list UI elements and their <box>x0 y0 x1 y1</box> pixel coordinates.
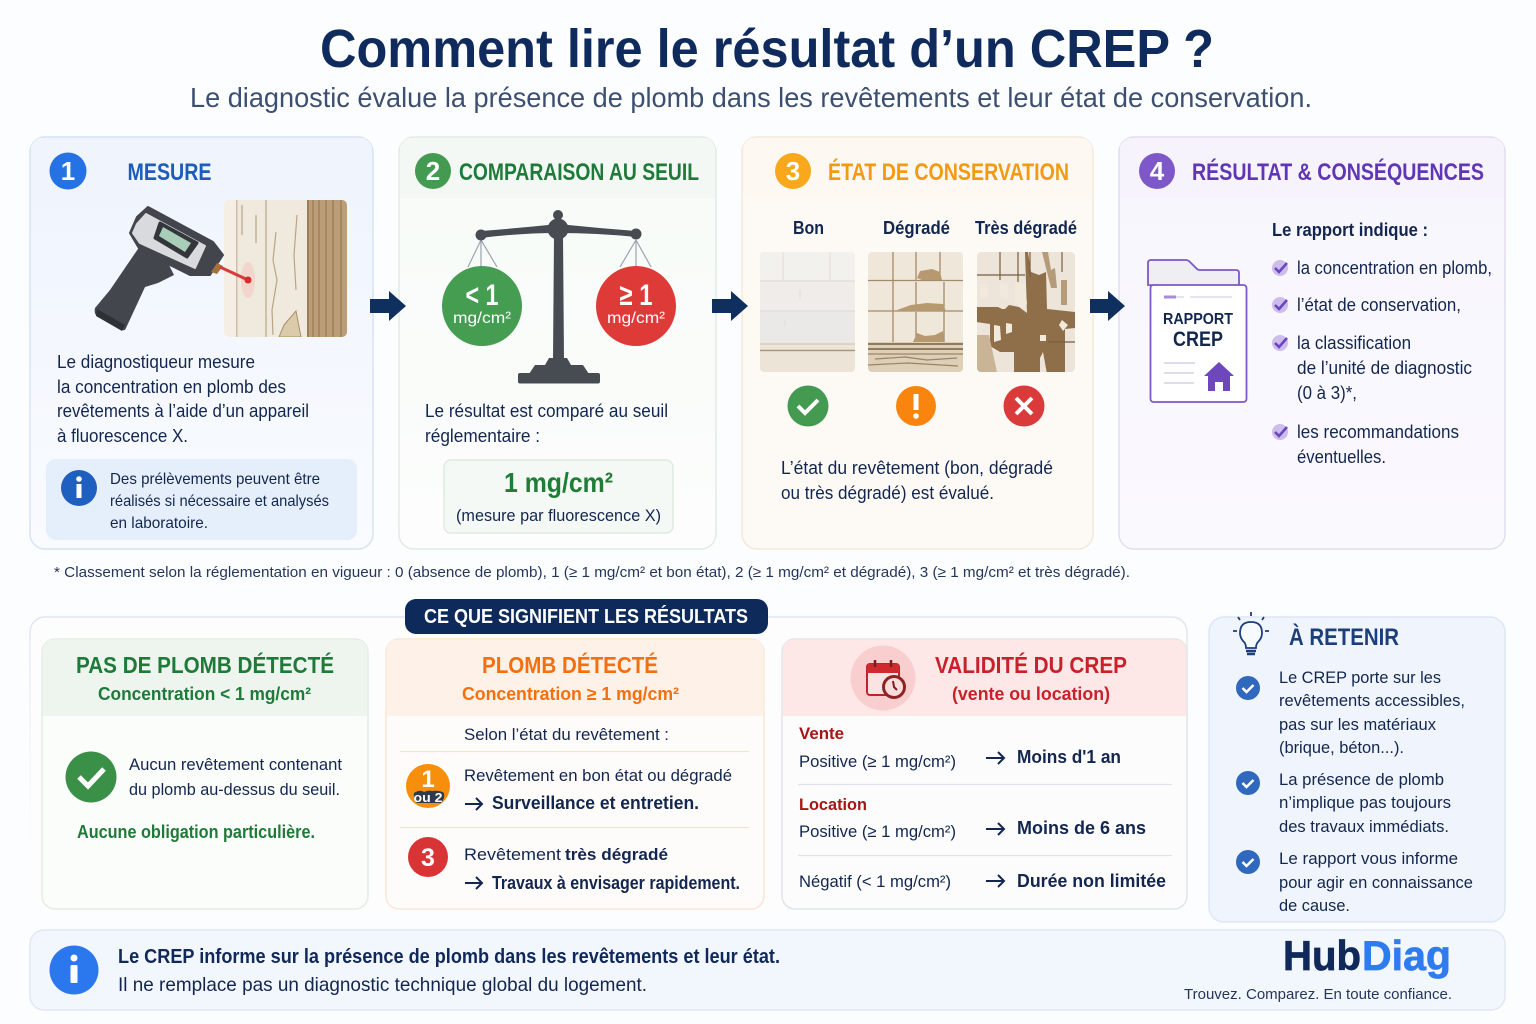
card: plomb détecté: Revêtement <box>464 845 561 864</box>
card: plomb détecté: Travaux à envisager rapidement. <box>492 873 740 893</box>
card: plomb détecté: Surveillance et entretien. <box>492 793 699 813</box>
column labels: Très dégradé <box>975 218 1077 238</box>
arrow: travaux <box>465 877 482 889</box>
card: pas de plomb détecté: Aucune obligation particulière. <box>77 822 315 842</box>
badge: supérieur au seuil: ≥ 1 <box>620 279 652 312</box>
illustration: revêtement en bon état <box>760 252 855 372</box>
callout: seuil réglementaire: (mesure par fluorescence X) <box>456 506 661 525</box>
step number 4 <box>1139 153 1175 189</box>
icon: information <box>50 946 98 994</box>
card: pas de plomb détecté <box>42 639 368 909</box>
column labels: Dégradé <box>883 218 950 238</box>
row: location: Positive (≥ 1 mg/cm²) <box>799 822 956 841</box>
badge: supérieur au seuil: mg/cm² <box>607 310 666 327</box>
key point 3: de cause. <box>1279 896 1350 915</box>
card: plomb détecté <box>386 639 764 909</box>
text: description de la mesure: à fluorescence X. <box>57 426 188 446</box>
key point 3: Le rapport vous informe <box>1279 849 1458 868</box>
checklist: contenu du rapport: de l’unité de diagnostic <box>1297 358 1472 378</box>
key point 1: Le CREP porte sur les <box>1279 668 1441 687</box>
checklist: contenu du rapport: la concentration en plomb, <box>1297 258 1492 278</box>
card: pas de plomb détecté: PAS DE PLOMB DÉTECTÉ <box>76 651 334 678</box>
callout: prélèvements: en laboratoire. <box>110 515 208 532</box>
callout: prélèvements: Des prélèvements peuvent être <box>110 471 320 488</box>
row: vente: Vente <box>799 724 844 743</box>
card: plomb détecté: Revêtement en bon état ou dégradé <box>464 766 732 785</box>
text: comparaison: réglementaire : <box>425 426 540 446</box>
row: vente: Moins d'1 an <box>1017 747 1121 767</box>
panel: comparaison au seuil <box>399 137 716 549</box>
card: pas de plomb détecté: Concentration < 1 mg/cm² <box>98 684 311 704</box>
subtitle: Le diagnostic évalue la présence de plomb dans les revêtements et leur état de conservation. <box>190 82 1312 113</box>
heading pill <box>405 599 768 634</box>
icon: ampoule <box>1233 612 1269 654</box>
key point 2 <box>1236 770 1451 836</box>
step number 4: 4 <box>1150 156 1165 186</box>
title: Comment lire le résultat d’un CREP ? <box>320 19 1214 79</box>
column labels <box>793 218 1077 238</box>
key point 1: (brique, béton...). <box>1279 738 1404 757</box>
card: pas de plomb détecté: Aucun revêtement contenant <box>129 755 342 774</box>
checklist: contenu du rapport: l’état de conservation, <box>1297 295 1461 315</box>
card: pas de plomb détecté: du plomb au-dessus du seuil. <box>129 780 340 799</box>
badge: supérieur au seuil <box>596 266 676 346</box>
illustration: painted wood wall <box>224 200 347 337</box>
text: comparaison <box>425 401 668 446</box>
illustration: revêtement dégradé <box>868 252 963 372</box>
arrow: étape 1 vers 2 <box>370 291 406 321</box>
card: validité du CREP <box>782 639 1187 909</box>
key point 1 <box>1236 668 1465 757</box>
logo: HubDiag: Hub <box>1283 932 1361 979</box>
badge: inférieur au seuil: < 1 <box>466 279 498 312</box>
step number 1: 1 <box>61 156 75 186</box>
illustration: XRF analyser <box>95 207 252 331</box>
badge: classes 1 ou 2: ou 2 <box>414 791 443 805</box>
heading: mesure: MESURE <box>128 159 212 186</box>
key point 1: pas sur les matériaux <box>1279 715 1436 734</box>
status icon: très dégradé <box>1004 386 1044 426</box>
illustration: balance <box>468 210 651 384</box>
panel: ce que signifient les résultats <box>30 599 1187 910</box>
row: négatif <box>799 871 1166 891</box>
checklist: contenu du rapport: la classification <box>1297 333 1411 353</box>
text: description de la mesure: Le diagnostiqueur mesure <box>57 352 255 372</box>
callout: prélèvements: réalisés si nécessaire et analysés <box>110 493 329 510</box>
arrow: surveillance <box>465 798 482 810</box>
row: location: Location <box>799 795 867 814</box>
text: conclusion: Le CREP informe sur la présence de plomb dans les revêtements et leur état. <box>118 946 780 968</box>
badge: classe 3 <box>408 837 448 877</box>
status icon: dégradé <box>896 386 936 426</box>
panel: à retenir <box>1209 612 1505 922</box>
badge: classe 3: 3 <box>421 844 435 872</box>
step number 3 <box>775 153 811 189</box>
heading: comparaison au seuil: COMPARAISON AU SEUIL <box>459 159 699 186</box>
logo: HubDiag <box>1283 932 1451 979</box>
callout: prélèvements <box>46 459 357 540</box>
card: plomb détecté: très dégradé <box>565 845 668 864</box>
footnote: * Classement selon la réglementation en vigueur : 0 (absence de plomb), 1 (≥ 1 mg/cm² et bon état), 2 (≥ 1 mg/cm² et dégradé), 3 (≥ 1 mg/cm² et très dégradé). <box>54 564 1130 581</box>
key point 2: des travaux immédiats. <box>1279 817 1449 836</box>
checklist: contenu du rapport: éventuelles. <box>1297 447 1386 467</box>
icon: dossier rapport CREP: RAPPORT <box>1163 311 1233 328</box>
checklist: contenu du rapport: (0 à 3)*, <box>1297 383 1357 403</box>
step number 2: 2 <box>426 156 440 186</box>
card: validité du CREP: (vente ou location) <box>952 684 1110 704</box>
card: plomb détecté: PLOMB DÉTECTÉ <box>482 651 658 678</box>
key point 2: n’implique pas toujours <box>1279 793 1451 812</box>
badge: inférieur au seuil <box>442 266 522 346</box>
arrow: étape 3 vers 4 <box>1090 291 1125 321</box>
tagline: Trouvez. Comparez. En toute confiance. <box>1184 986 1452 1003</box>
card: validité du CREP: VALIDITÉ DU CREP <box>935 651 1127 678</box>
card: plomb détecté: Concentration ≥ 1 mg/cm² <box>462 684 679 704</box>
key point 3 <box>1236 849 1473 915</box>
text: conclusion: Il ne remplace pas un diagnostic technique global du logement. <box>118 974 647 996</box>
banner: conclusion <box>30 930 1505 1010</box>
icon: dossier rapport CREP <box>1148 260 1246 402</box>
heading pill: CE QUE SIGNIFIENT LES RÉSULTATS <box>424 605 748 628</box>
key point 3: pour agir en connaissance <box>1279 873 1473 892</box>
heading: à retenir: À RETENIR <box>1289 623 1399 651</box>
heading: le rapport indique: Le rapport indique : <box>1272 220 1428 240</box>
step number 3: 3 <box>786 156 800 186</box>
key point 1: revêtements accessibles, <box>1279 691 1465 710</box>
step number 2 <box>415 153 451 189</box>
illustration: revêtement très dégradé <box>976 252 1075 374</box>
text: comparaison: Le résultat est comparé au seuil <box>425 401 668 421</box>
arrow: étape 2 vers 3 <box>712 291 748 321</box>
row: négatif: Durée non limitée <box>1017 871 1166 891</box>
status icon: bon <box>788 386 828 426</box>
card: plomb détecté: Selon l’état du revêtement : <box>464 725 669 744</box>
badge: inférieur au seuil: mg/cm² <box>453 310 512 327</box>
checklist: contenu du rapport <box>1272 258 1492 467</box>
column labels: Bon <box>793 218 824 238</box>
text: description de la mesure: revêtements à l’aide d’un appareil <box>57 401 309 421</box>
icon: calendrier et horloge <box>850 646 916 710</box>
callout: seuil réglementaire: 1 mg/cm² <box>504 467 613 498</box>
text: description de la mesure <box>57 352 309 446</box>
row: vente: Positive (≥ 1 mg/cm²) <box>799 752 956 771</box>
row: location: Moins de 6 ans <box>1017 818 1146 838</box>
row: négatif: Négatif (< 1 mg/cm²) <box>799 872 951 891</box>
checklist: contenu du rapport: les recommandations <box>1297 422 1459 442</box>
panel: état de conservation <box>742 137 1093 549</box>
callout: seuil réglementaire <box>444 460 673 533</box>
text: état évalué: L’état du revêtement (bon, dégradé <box>781 458 1053 478</box>
logo: HubDiag: Diag <box>1362 932 1451 979</box>
text: description de la mesure: la concentration en plomb des <box>57 377 286 397</box>
icon: dossier rapport CREP: CREP <box>1173 328 1223 351</box>
row: vente <box>799 724 1121 771</box>
heading: état de conservation: ÉTAT DE CONSERVATION <box>828 158 1069 186</box>
row: location <box>799 795 1146 841</box>
text: conclusion <box>118 946 780 996</box>
step number 1 <box>50 152 86 190</box>
badge: classes 1 ou 2 <box>406 764 450 808</box>
badge: classes 1 ou 2: 1 <box>421 766 435 793</box>
key point 2: La présence de plomb <box>1279 770 1444 789</box>
text: état évalué <box>781 458 1053 503</box>
panel: mesure <box>30 137 373 549</box>
panel: résultat et conséquences <box>1119 137 1505 549</box>
text: état évalué: ou très dégradé) est évalué. <box>781 483 994 503</box>
